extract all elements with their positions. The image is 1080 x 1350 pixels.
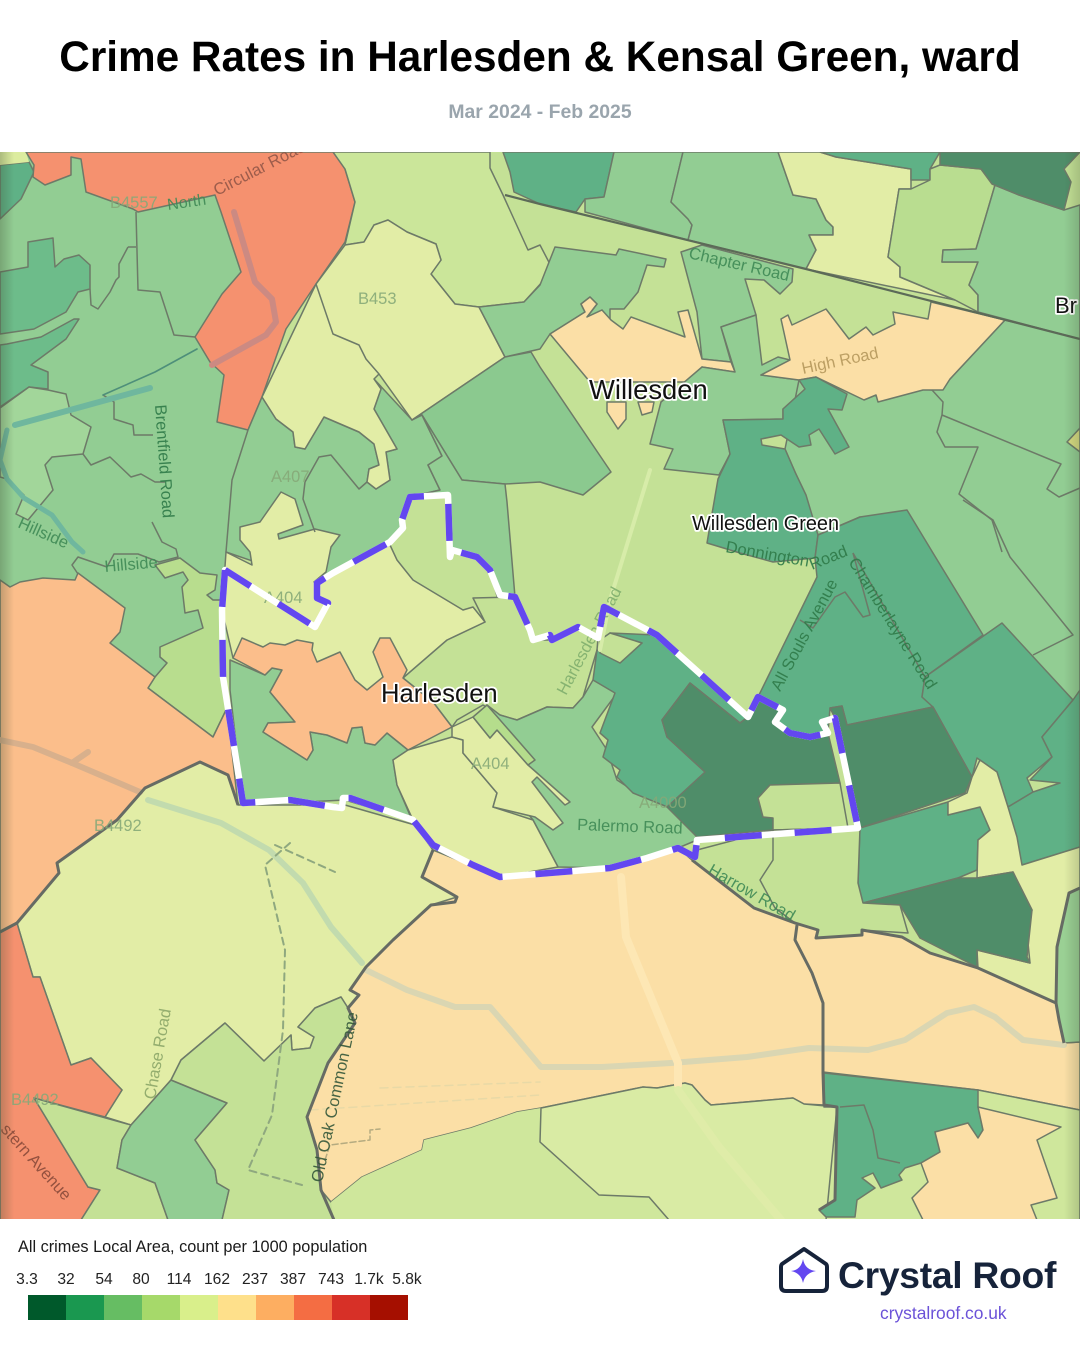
area: Chapter Road green <box>681 245 793 362</box>
legend: colour scale: 80 <box>132 1271 150 1288</box>
area: bottom-left green <box>117 1080 229 1220</box>
area: pale strip <box>948 760 1080 1003</box>
area: central cell green <box>412 352 611 495</box>
area: High Road pale orange <box>761 302 1005 402</box>
road labels: Chapter Road <box>687 244 791 285</box>
icon: house with star <box>779 1247 829 1293</box>
area: Hillside lime <box>148 558 227 737</box>
area: bottom right green <box>819 1073 983 1217</box>
road labels: Hillside <box>104 553 158 576</box>
road shields: A407 <box>271 468 310 486</box>
map edge shading <box>0 152 1080 1219</box>
area: east block green <box>922 623 1073 807</box>
legend: colour scale: 114 <box>167 1271 191 1288</box>
place labels: Willesden <box>589 374 708 405</box>
road shields: A404 <box>471 755 510 773</box>
area: top-left dark corner <box>0 162 34 219</box>
road labels <box>0 138 940 1204</box>
area: central top green <box>479 247 666 357</box>
area: Willesden centre green <box>650 315 805 475</box>
road labels: Harlesden Road <box>554 584 626 698</box>
road labels: Road <box>807 542 850 574</box>
area: north-west lighter cell <box>0 387 91 520</box>
area: lime strip <box>473 705 535 765</box>
road labels: High Road <box>800 344 880 378</box>
area: north-west mid green 2 <box>0 319 79 407</box>
area: darkest green east <box>830 706 972 828</box>
area: darkest green south-east <box>863 872 1032 967</box>
subtitle: date range: Mar 2024 - Feb 2025 <box>448 101 632 123</box>
road labels: Harrow Road <box>705 861 798 925</box>
choropleth map <box>0 152 1080 1219</box>
road shields <box>11 194 687 1109</box>
area: south big pale orange <box>307 848 1080 1202</box>
place labels: Willesden Green <box>692 513 839 535</box>
area: north block green <box>758 510 983 737</box>
legend: colour scale: 743 <box>318 1271 344 1288</box>
place labels <box>381 293 1077 708</box>
legend: colour scale: 32 <box>57 1271 75 1288</box>
area: Harrow Road lime <box>692 828 908 938</box>
area: bottom-left lime 2 <box>171 997 355 1220</box>
area: ward pale north <box>222 492 485 690</box>
area: darkest green west <box>662 683 840 837</box>
area: ward pale south <box>393 737 558 877</box>
area: mid-dark green <box>593 633 748 808</box>
area: bottom right pale orange <box>912 1107 1061 1220</box>
ward boundary <box>222 495 858 877</box>
place labels: Br <box>1055 293 1077 318</box>
area: small lime <box>600 633 642 663</box>
area: east light green <box>785 320 1080 760</box>
area: ward pale comb <box>452 717 570 830</box>
area: ward lower-centre <box>403 597 598 727</box>
road labels: North <box>166 192 207 214</box>
diagonal railway line <box>505 195 1080 339</box>
area: far east green <box>1056 888 1080 1043</box>
area: north-west green <box>0 152 333 760</box>
area: small right pale <box>1067 428 1080 452</box>
area: A407 green <box>226 379 442 582</box>
area: south-west orange <box>0 573 238 932</box>
road shields: B4492 <box>94 817 142 835</box>
road labels: Hillside <box>15 514 71 552</box>
legend: colour scale: 387 <box>280 1271 306 1288</box>
borough boundary <box>0 762 1080 1220</box>
thin cell boundaries <box>72 212 1080 1163</box>
brand: Crystal Roof logo <box>779 1247 1056 1323</box>
legend: colour scale <box>16 1271 422 1320</box>
brand name: Crystal Roof <box>838 1254 1056 1296</box>
area: top lime north of B453 <box>333 152 553 307</box>
area: south-east green <box>858 802 990 903</box>
road shields: B4557 <box>110 194 158 212</box>
legend: colour scale: 54 <box>95 1271 113 1288</box>
area: north-west mid green 1 <box>0 238 90 334</box>
legend: colour scale: 162 <box>204 1271 230 1288</box>
area: ward orange <box>233 638 452 760</box>
road labels: Chase Road <box>141 1007 175 1101</box>
road shields: B4492 <box>11 1091 59 1109</box>
website: crystalroof.co.uk <box>880 1303 1007 1323</box>
place labels: Harlesden <box>381 680 498 708</box>
road labels: Chamberlayne Road <box>845 555 940 692</box>
legend title: All crimes Local Area, count per 1000 population <box>18 1238 367 1256</box>
area: bottom-left lime <box>34 1098 168 1220</box>
area: A404 corridor green <box>410 415 515 597</box>
road labels: All Souls Avenue <box>768 576 842 694</box>
area: lime rectangle <box>758 783 848 830</box>
area: Willesden pale orange <box>550 297 735 382</box>
road labels: Palermo Road <box>577 816 683 838</box>
area: top centre <box>503 152 614 212</box>
area: bottom pale <box>331 1083 837 1220</box>
legend: colour scale: 3.3 <box>16 1271 38 1288</box>
area: B453 pale <box>262 220 505 489</box>
area: ward south-centre green <box>487 680 697 868</box>
area: south-west pale <box>17 762 457 1125</box>
road shields: B453 <box>358 290 397 308</box>
road labels: Old Oak Common Lane <box>308 1011 362 1184</box>
title: Crime Rates in Harlesden & Kensal Green, ward <box>59 33 1021 80</box>
legend: colour scale: 1.7k <box>354 1271 384 1288</box>
area: bottom right lime <box>826 1090 1080 1220</box>
water, rail and road corridors <box>0 212 1064 1220</box>
area: top-left red <box>26 152 355 430</box>
road shields: A4000 <box>639 794 687 812</box>
area: Willesden Green mid-green <box>707 377 849 562</box>
legend: colour scale: 237 <box>242 1271 268 1288</box>
area: ward south-west green <box>230 660 412 820</box>
road labels: Donnington <box>724 538 811 571</box>
road shields: A404 <box>264 589 303 607</box>
legend: colour scale: 5.8k <box>392 1271 422 1288</box>
area: south-west red <box>0 923 122 1220</box>
road labels: Brentfield Road <box>151 404 177 519</box>
